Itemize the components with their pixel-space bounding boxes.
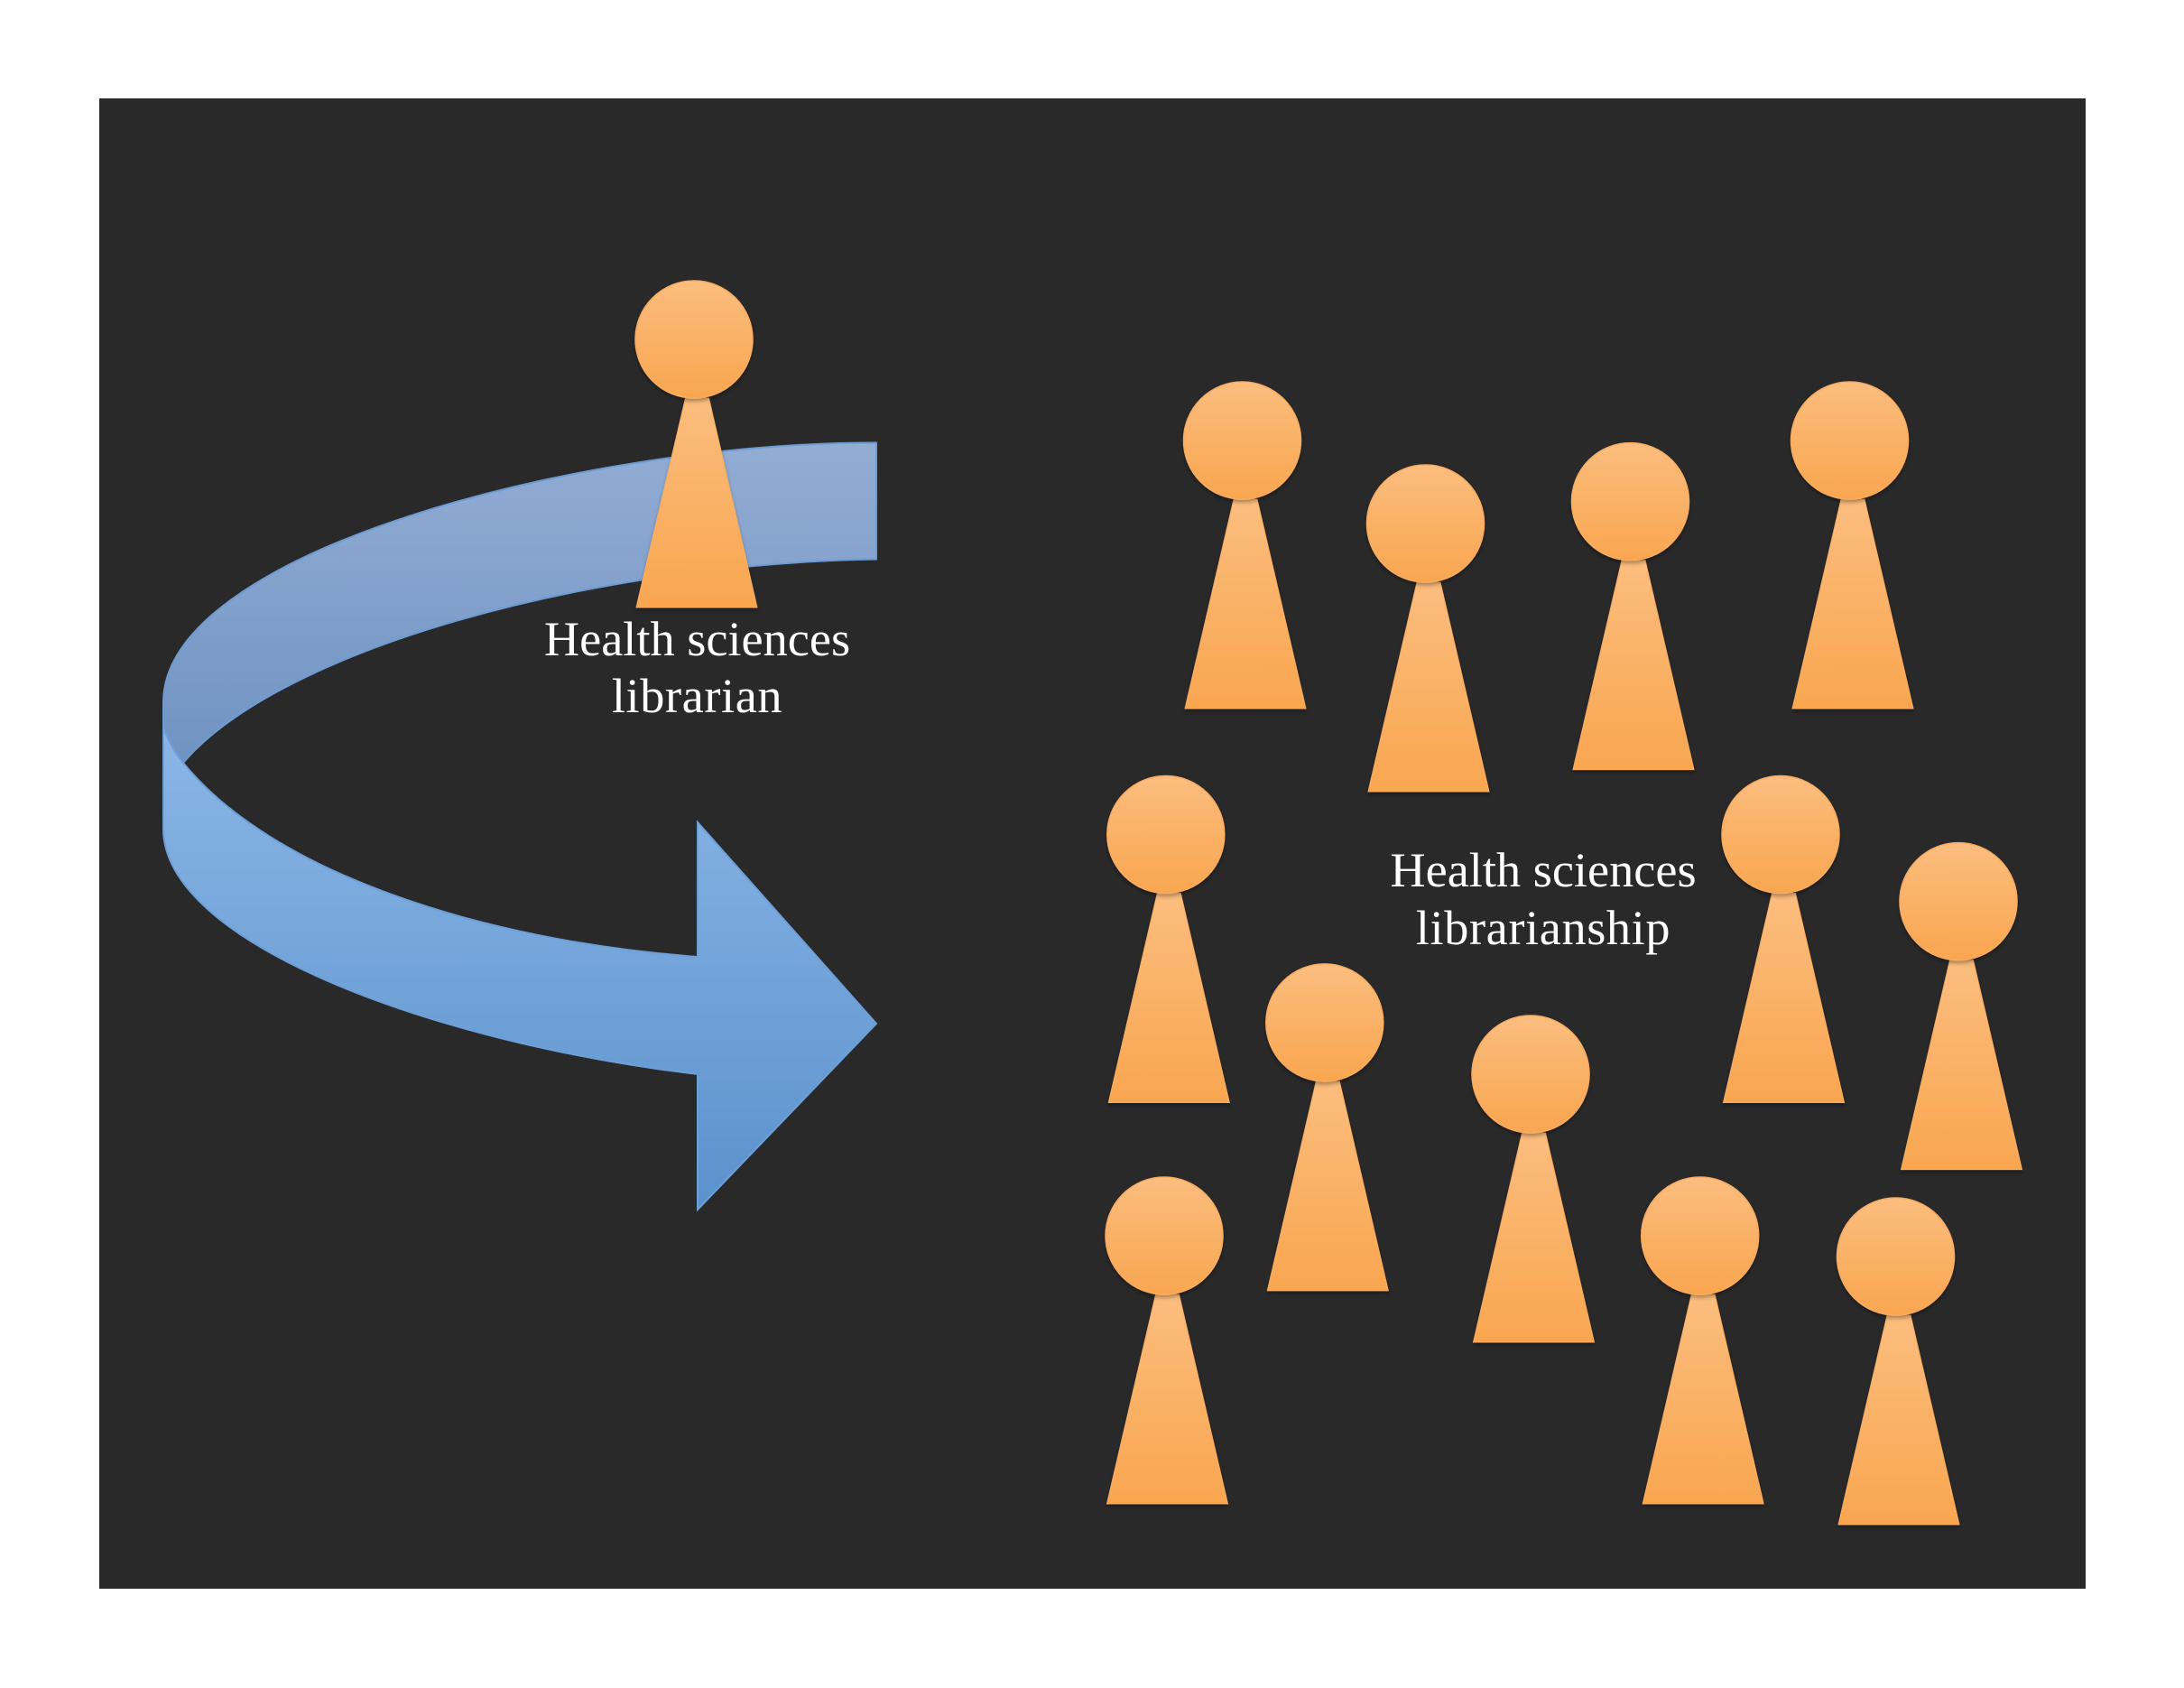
figure: group member 9 [1472,1016,1594,1342]
figure: group member 1 [1184,382,1306,709]
figure: group member 2 [1366,465,1489,792]
label: health sciences librarianship: Health sciences [1390,843,1697,897]
figure: group member 10 [1106,1177,1227,1504]
figure: group member 11 [1642,1177,1763,1504]
figure: group member 3 [1572,443,1694,770]
curved arrow [163,442,876,1210]
figure: group member 8 [1266,964,1388,1291]
figure: group member 7 [1900,843,2022,1170]
figure: health sciences librarian [635,281,757,607]
label: health sciences librarian: Health sciences [544,612,850,666]
figure: group member 6 [1722,776,1845,1103]
label: health sciences librarianship: librarianship [1416,901,1670,955]
figure: group member 12 [1837,1198,1959,1525]
figure: group member 4 [1791,382,1913,709]
arrow: lower front band and head [163,728,876,1210]
label: health sciences librarian: librarian [612,669,782,723]
arrow: upper back band [163,442,876,763]
figure: group member 5 [1107,776,1229,1103]
